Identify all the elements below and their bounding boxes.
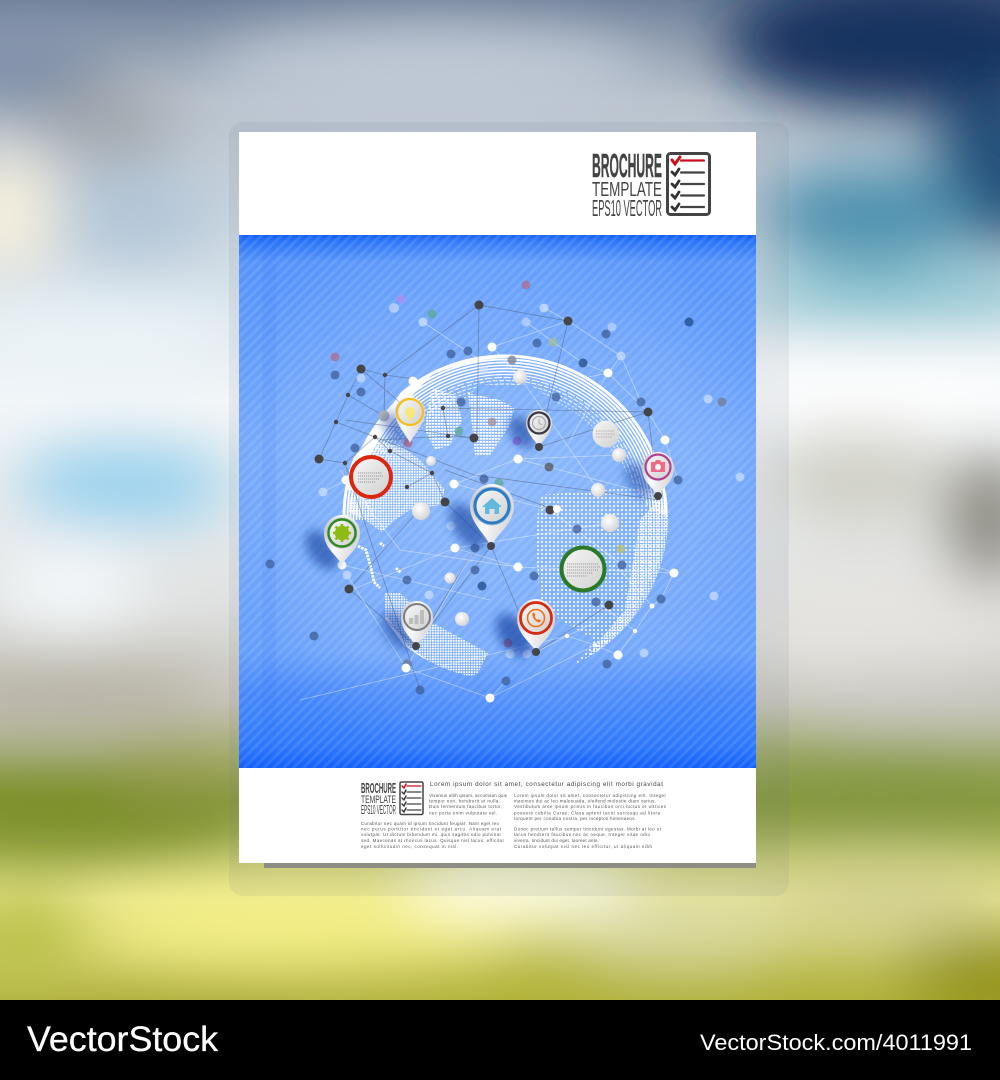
- footer body text: viverra, tincidunt dui eget, laoreet ante.: [514, 838, 599, 843]
- dark nodes: [314, 300, 652, 610]
- header title logo: [592, 147, 662, 221]
- footer checklist icon: [400, 782, 423, 814]
- footer body text: tempor non, hendrerit et nulla.: [429, 798, 500, 804]
- footer body text: nec porta enim vulputate vel.: [429, 810, 497, 816]
- brochure footer panel: EPS10 VECTOR: [361, 803, 396, 817]
- shaded ball nodes: [378, 370, 626, 626]
- footer logo: [361, 780, 396, 817]
- pin: gear: [299, 515, 360, 575]
- icon: checklist: [668, 154, 710, 214]
- footer body text: Lorem ipsum dolor sit amet, consectetur adipiscing elit. Integer: [514, 793, 666, 798]
- footer body text: torquent per conubia nostra, per inceptos himenaeos.: [514, 816, 636, 821]
- pin: clock: [503, 410, 552, 453]
- brochure footer panel: BROCHURE: [361, 780, 396, 797]
- network connection lines: [300, 305, 678, 700]
- brochure footer panel: [239, 768, 756, 863]
- brochure header panel: EPS10 VECTOR: [592, 195, 662, 221]
- pin: bar chart: [375, 601, 433, 655]
- watermark bar: [0, 1000, 1000, 1080]
- pin: camera: [619, 452, 674, 503]
- footer body text: maximus dui ac leo malesuada, eleifend molestie diam varius.: [514, 798, 656, 804]
- pale and coloured translucent nodes: [318, 280, 744, 658]
- note disc: green ring: [562, 548, 604, 590]
- brochure header panel: [239, 132, 756, 236]
- dark links: [319, 305, 660, 690]
- footer logo: TEMPLATE: [361, 794, 396, 806]
- pin: yellow location: [377, 397, 425, 449]
- footer headline: Lorem ipsum dolor sit amet, consectetur adipiscing elit morbi gravidat: [430, 781, 663, 788]
- footer body text: lacus hendrerit faucibus nec ac neque. Integer vitae odio: [514, 832, 650, 837]
- brochure header panel: BROCHURE: [592, 147, 662, 184]
- note disc: plain grey: [592, 420, 620, 448]
- footer body text: Vestibulum ante ipsum primis in faucibus orci luctus et ultrices: [514, 804, 667, 809]
- footer body text: eget sollicitudin nec, consequat in nisl.: [361, 844, 458, 849]
- footer body text: Duis fermentum faucibus tortor,: [429, 804, 502, 809]
- footer body text: Curabitur nec quam id ipsum tincidunt feugiat. Nam eget leo: [361, 821, 499, 826]
- continent: south america: [385, 593, 488, 678]
- translucent frame behind brochure: [229, 122, 789, 896]
- light links: [300, 308, 678, 700]
- footer body text: volutpat. Ut dictum bibendum mi, quis sagittis odio pulvinar: [361, 832, 502, 837]
- network nodes: [266, 280, 744, 702]
- continent: greenland: [468, 393, 514, 455]
- continent: arctic islands: [425, 388, 462, 450]
- footer body text: Donec pretium tellus semper tincidunt egestas. Morbi at leo ut: [514, 826, 662, 832]
- top and left bright limb crescent: [348, 375, 432, 490]
- continent: north america: [348, 442, 445, 532]
- footer body text: [361, 793, 667, 849]
- footer body text: sed. Maecenas at rhoncus lacus. Quisque nisl lacus, efficitur: [361, 838, 504, 843]
- watermark url and id: VectorStock.com/4011991: [700, 1030, 972, 1055]
- footer body text: nec purus porttitor tincidunt et eget arcu. Aliquam erat: [361, 826, 502, 832]
- footer body text: posuere cubilia Curae; Class aptent taciti sociosqu ad litora: [514, 810, 660, 816]
- brochure blue cover panel: [239, 235, 756, 769]
- dotted world globe: [344, 356, 668, 680]
- footer body text: Vivamus nibh ipsum, accumsan quis: [429, 793, 508, 798]
- footer body text: Curabitur volutpat nisl nec leo efficitur, ut aliquam nibh: [514, 844, 652, 849]
- globe limb rings: [342, 354, 668, 520]
- continent: africa and asia: [537, 486, 667, 663]
- continent: central america: [358, 543, 401, 588]
- continents: [348, 388, 668, 680]
- watermark logo text: VectorStock: [27, 1020, 219, 1059]
- note disc: red ring: [351, 457, 391, 497]
- pin: home: [442, 484, 514, 555]
- white nodes: [338, 342, 678, 702]
- pin: phone: [489, 599, 555, 663]
- brochure back page shadow: [264, 860, 756, 868]
- header title logo: TEMPLATE: [592, 179, 662, 201]
- slate nodes: [266, 318, 726, 694]
